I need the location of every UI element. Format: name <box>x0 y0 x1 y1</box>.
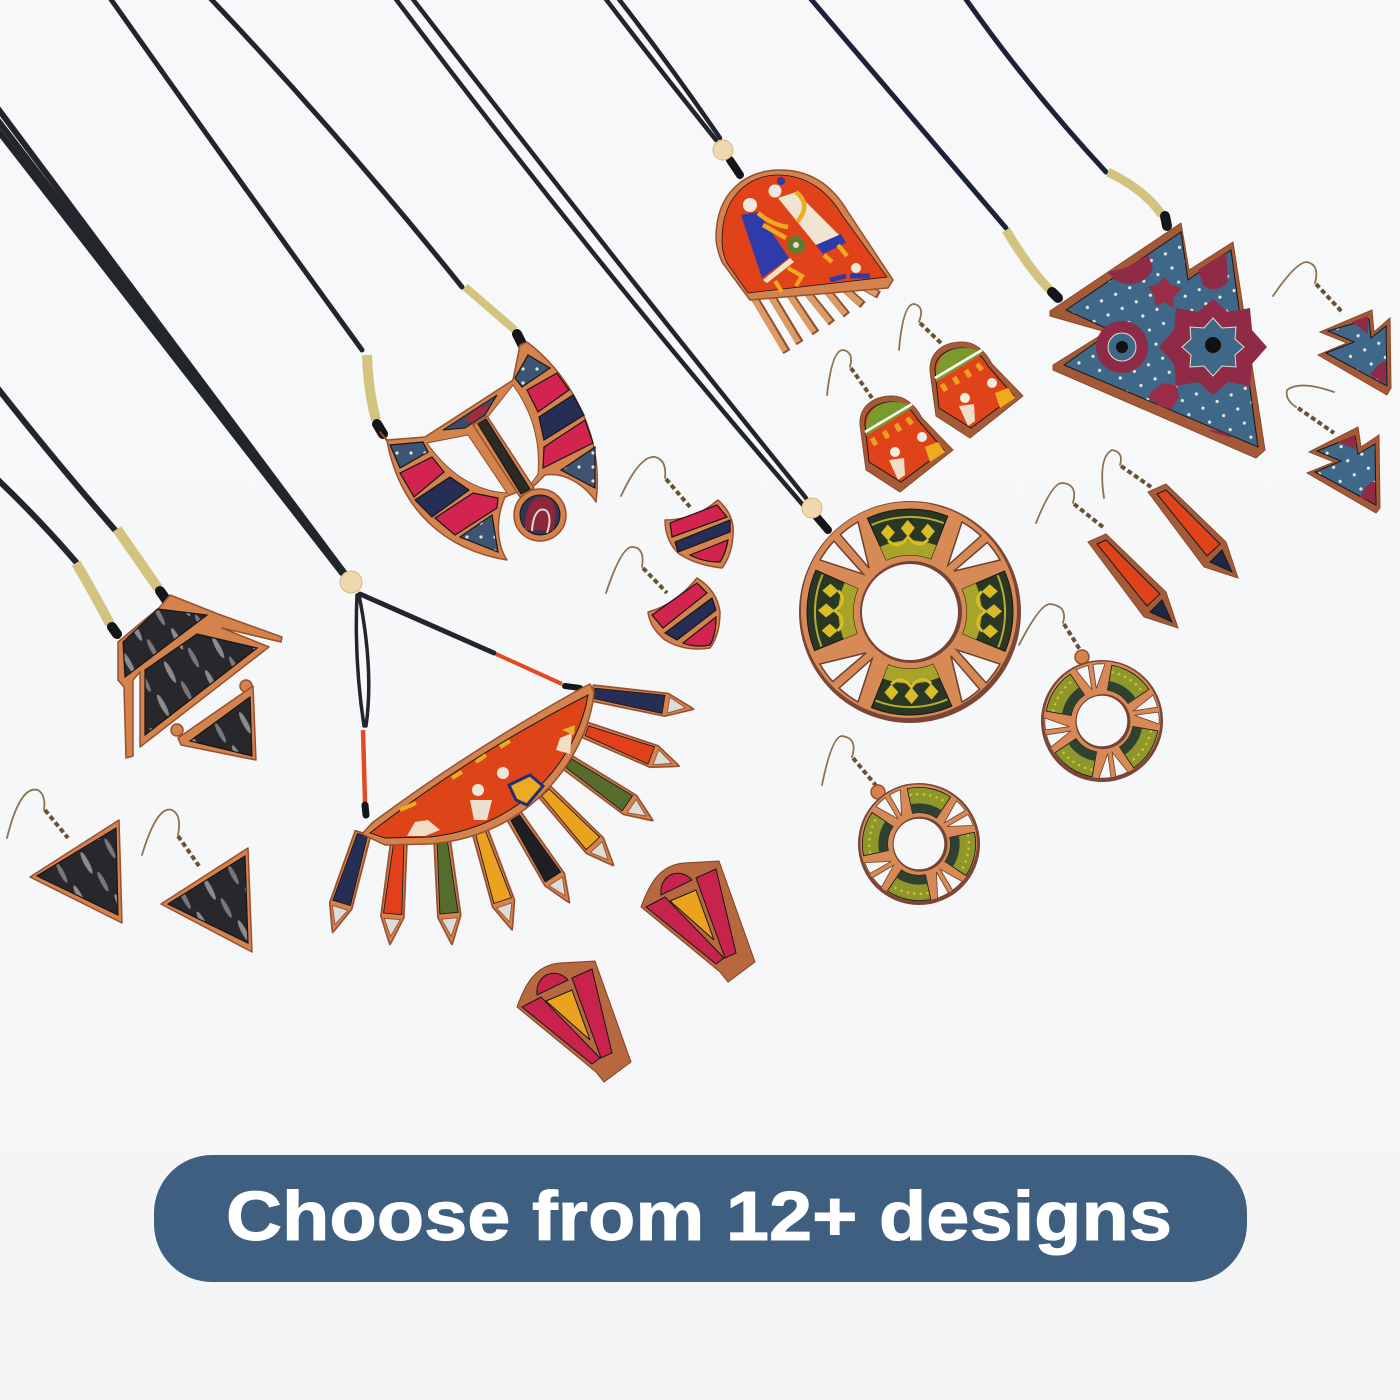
fabric figures <box>400 725 575 836</box>
necklace: Warli half disc with spikes <box>0 106 696 946</box>
spikes <box>322 682 696 946</box>
necklace: crescent with stripes <box>110 0 597 560</box>
painted figures <box>741 177 870 292</box>
earring pair: orange pencil drops <box>1036 450 1238 628</box>
earring pair: ikat triangles <box>7 790 252 952</box>
earring pair: Ajrakh rings <box>822 604 1186 916</box>
comb teeth <box>754 285 879 352</box>
earring pair: Warli arches <box>827 304 1023 492</box>
icon: wooden bead <box>802 498 822 518</box>
earring pair: Ajrakh arrows <box>1273 262 1391 513</box>
icon: wooden bead <box>340 571 362 593</box>
Ajrakh motifs <box>1096 252 1267 438</box>
necklace: Ajrakh arrow triangle <box>810 0 1267 458</box>
banner: choose from designs <box>154 1155 1247 1282</box>
necklace: Warli arch comb pendant <box>605 0 893 352</box>
ring pendant <box>799 501 1021 723</box>
earring pair: red and yellow fans <box>517 861 755 1082</box>
banner text: Choose from 12+ designs <box>226 1177 1172 1255</box>
necklace: dual cord with Ajrakh ring <box>395 0 1021 723</box>
earring pair: striped shields <box>606 457 733 649</box>
necklace: ikat tangram pendant <box>0 386 282 760</box>
icon: wooden bead <box>713 140 733 160</box>
